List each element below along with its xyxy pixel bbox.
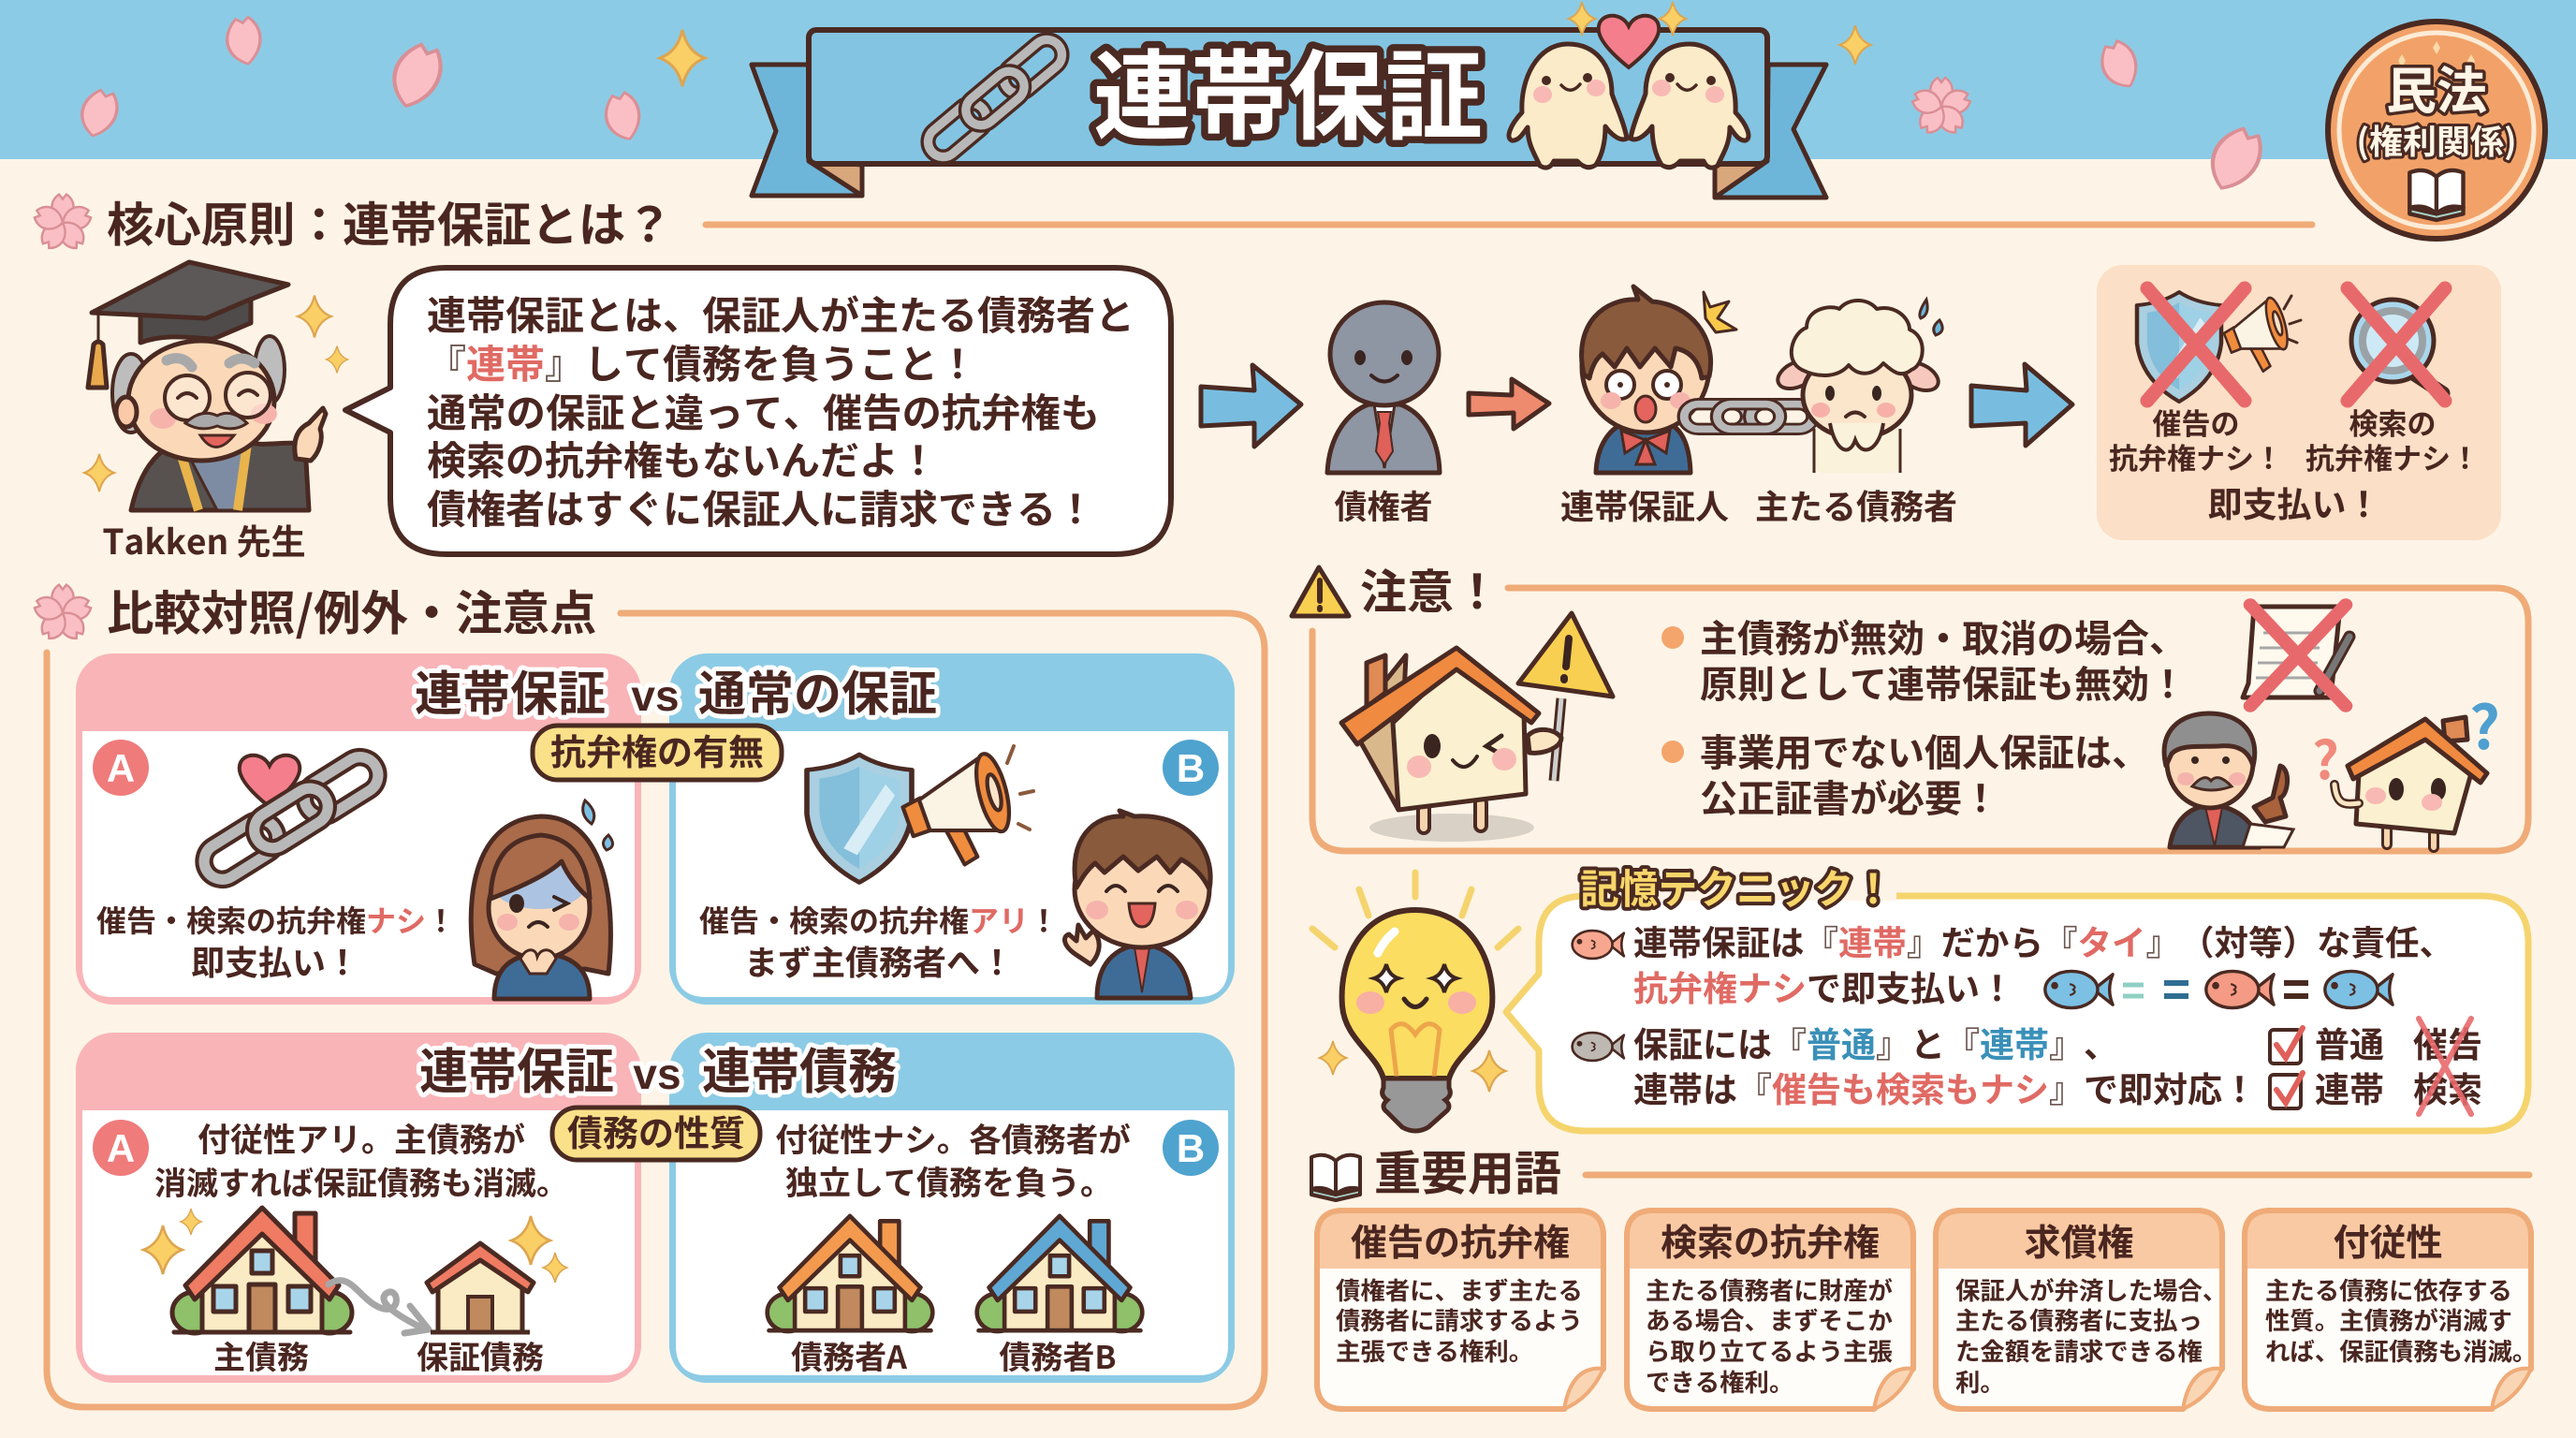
term card: 求償権: た金額を請求できる権 [1955,1331,2203,1368]
sparkles [298,296,331,337]
banner plate [809,30,1767,164]
icon: light bulb mascot [1312,873,1518,1131]
term card: 検索の抗弁権 [1627,1211,1913,1409]
badge A [93,740,149,796]
heading: caution [1292,555,1500,623]
mortarboard [140,298,251,343]
term card: 求償権: 保証人が弁済した場合、 [1955,1270,2227,1307]
term card: 求償権: 主たる債務者に支払っ [1955,1300,2203,1337]
figure: joint guarantor [1560,286,1736,529]
caution text: 主債務が無効・取消の場合、 [1700,609,2187,663]
term card: 検索の抗弁権: 主たる債務者に財産が [1646,1270,1893,1307]
term card: 求償権: 求償権 [2024,1214,2134,1267]
text B: 催告・検索の抗弁権アリ！ [699,898,1059,941]
checklist [2270,1017,2482,1114]
arrow: creditor to guarantor [1469,379,1549,429]
house: main debt: 主債務 [213,1332,309,1378]
arrow: wavy [329,1281,421,1328]
card A: 消滅すれば保証債務も消滅。 [154,1158,568,1204]
card B: まず主債務者へ！ [744,936,1014,985]
arrow: to result [1971,364,2072,446]
comparison title 2: 連帯保証 [419,1033,614,1103]
hair [112,354,150,433]
hand [295,408,326,461]
speech bubble: definition: 検索の抗弁権もないんだよ！ [427,430,938,487]
speech bubble: definition: 通常の保証と違って、催告の抗弁権も [427,382,1100,439]
heading: comparison: 比較対照/例外・注意点 [107,576,596,644]
fish equation [2045,971,2393,1008]
term card: 催告の抗弁権: 催告の抗弁権 [1351,1214,1570,1267]
badge: civil law: (権利関係) [2356,115,2517,164]
card A: A [107,746,135,790]
term card: 催告の抗弁権: 主張できる権利。 [1336,1331,1533,1368]
house: guarantee debt [417,1216,567,1378]
panel: result: 抗弁権ナシ！ [2109,435,2283,477]
term card: 求償権: 利。 [1955,1362,2005,1399]
mustache and mouth [200,435,234,448]
character: Takken teacher [84,262,348,510]
badge: civil law [2328,22,2545,239]
house: main debt [143,1208,352,1378]
text A: 催告・検索の抗弁権ナシ！ [96,898,456,941]
card A [76,1033,641,1383]
speech bubble: definition: 『連帯』して債務を負うこと！ [427,333,977,390]
title banner [752,2,1826,198]
term card: 検索の抗弁権: 検索の抗弁権 [1661,1214,1880,1267]
icon: megaphone [895,751,1021,875]
panel: result: 検索の [2349,401,2436,443]
heading: caution: 注意！ [1360,555,1500,623]
panel: memory technique: 保証には『普通』と『連帯』、 [1633,1017,2118,1067]
panel: memory technique: 連帯保証は『連帯』だから『タイ』（対等）な責任、 [1633,916,2453,965]
text: 催告の [2153,401,2239,443]
badge: civil law: 民法 [2386,50,2487,124]
icon: heart [240,756,300,807]
comparison 2: joint guarantee vs joint debt [76,1033,1235,1383]
comparison 2: joint guarantee vs joint debt: vs [633,1049,681,1098]
comparison 1: joint vs ordinary guarantee: vs [631,671,680,720]
panel: result [2097,265,2501,540]
decorations: petals and sparkles [77,15,2268,198]
panel: caution outline [1312,588,2528,851]
term card: 付従性: 付従性 [2333,1214,2443,1267]
heading: 記憶テクニック！ [1580,858,1893,916]
comparison 1: joint vs ordinary guarantee: 通常の保証 [698,655,937,725]
line 2: 抗弁権ナシで即支払い！ [1633,961,2014,1011]
mascots holding hands [1509,2,1749,168]
glasses [165,375,210,420]
line 3 [1573,1033,1624,1061]
pill: nature of debt: 債務の性質 [567,1105,745,1156]
speech bubble: definition: 連帯保証とは、保証人が主たる債務者と [427,285,1134,342]
card B: 独立して債務を負う。 [785,1157,1113,1205]
ribbon tail right [1715,65,1826,198]
mascot: house with warning sign [1341,613,1613,842]
arrow: bubble to creditor [1201,365,1301,447]
figure: notary [2164,713,2293,847]
caution text: 原則として連帯保証も無効！ [1700,654,2187,709]
comparison 1: joint vs ordinary guarantee [76,653,1235,1005]
line 1 [1573,931,1624,959]
heading: key terms: 重要用語 [1374,1137,1561,1204]
term card: 催告の抗弁権 [1317,1211,1603,1409]
panel: comparison outline [47,613,1265,1407]
spark [1704,292,1736,332]
card B [669,1033,1235,1383]
label: 主たる債務者 [1755,480,1957,529]
icon: chain [922,34,1068,163]
term card: 付従性: れば、保証債務も消滅。 [2265,1331,2537,1368]
house: debtor A: 債務者A [791,1332,907,1378]
mascot: confused house: ? [2469,681,2500,767]
checklist: 検索 [2413,1062,2482,1112]
heading: key terms [1311,1137,2529,1204]
card B: B [1177,746,1205,790]
caution text: 公正証書が必要！ [1700,769,1999,823]
figure: principal debtor sheep [1755,300,1957,529]
checklist: 連帯 [2315,1062,2384,1112]
comparison title 1: 連帯保証 [415,655,606,725]
heading: core principle [33,187,2312,256]
card A: 即支払い！ [191,936,359,985]
gown [131,442,309,510]
badge B [1163,740,1219,796]
icon: shield [807,755,912,882]
checklist: 普通 [2315,1017,2384,1067]
label: 連帯保証人 [1560,480,1729,529]
term card: 検索の抗弁権: ら取り立てるよう主張 [1646,1331,1894,1368]
figure: creditor [1327,302,1440,529]
term card: 検索の抗弁権: できる権利。 [1646,1362,1793,1399]
comparison 2: joint guarantee vs joint debt: 連帯債務 [702,1033,897,1103]
panel: result: 抗弁権ナシ！ [2305,435,2480,477]
checklist: 催告 [2413,1017,2482,1067]
mascot: confused house: ? [2312,719,2339,795]
heading: core principle: 核心原則：連帯保証とは？ [107,187,673,256]
ribbon tail left [752,65,862,196]
line 4: 連帯は『催告も検索もナシ』で即対応！ [1633,1062,2257,1112]
speech bubble: definition: 債権者はすぐに保証人に請求できる！ [427,478,1095,536]
head [128,341,274,461]
label: 債権者 [1334,481,1433,529]
header band [0,0,2576,159]
icon: magnifier crossed [2348,288,2445,401]
caution text [1661,609,2187,823]
text A: 付従性アリ。主債務が [198,1114,525,1162]
speech bubble: definition [345,268,1171,554]
house: guarantee debt: 保証債務 [417,1332,544,1378]
chain: guarantor to debtor [1684,404,1813,429]
term card: 催告の抗弁権: 債権者に、まず主たる [1336,1270,1583,1307]
term card: 求償権 [1936,1211,2227,1409]
icon: chain [198,750,385,887]
house: debtor A [768,1216,932,1378]
pill: defences: 抗弁権の有無 [550,724,764,775]
card B: B [1177,1126,1205,1170]
mascot: confused house [2312,681,2500,847]
text B: 付従性ナシ。各債務者が [775,1114,1131,1161]
label: Takken teacher: Takken 先生 [102,514,306,565]
house: debtor B [977,1216,1142,1378]
caution text: 事業用でない個人保証は、 [1700,723,2149,777]
term card: 催告の抗弁権: 債務者に請求するよう [1336,1300,1583,1337]
icon: crossed-out document [2243,605,2349,706]
card A [76,653,641,1005]
card B [669,653,1235,1005]
icon: shield and megaphone crossed [2137,288,2301,402]
badge B [1163,1120,1219,1176]
girl [471,800,613,999]
term card: 付従性: 主たる債務に依存する [2265,1270,2512,1307]
term card: 付従性 [2245,1211,2537,1409]
panel: memory technique [1506,858,2528,1131]
badge A [93,1120,149,1176]
house: debtor B: 債務者B [999,1332,1117,1378]
title text: 連帯保証 [1093,18,1483,159]
card A: A [107,1126,135,1170]
boy [1064,811,1210,998]
term card: 付従性: 性質。主債務が消滅す [2265,1300,2512,1337]
term card: 検索の抗弁権: ある場合、まずそこか [1646,1300,1893,1337]
panel: result: 即支払い！ [2207,477,2381,527]
